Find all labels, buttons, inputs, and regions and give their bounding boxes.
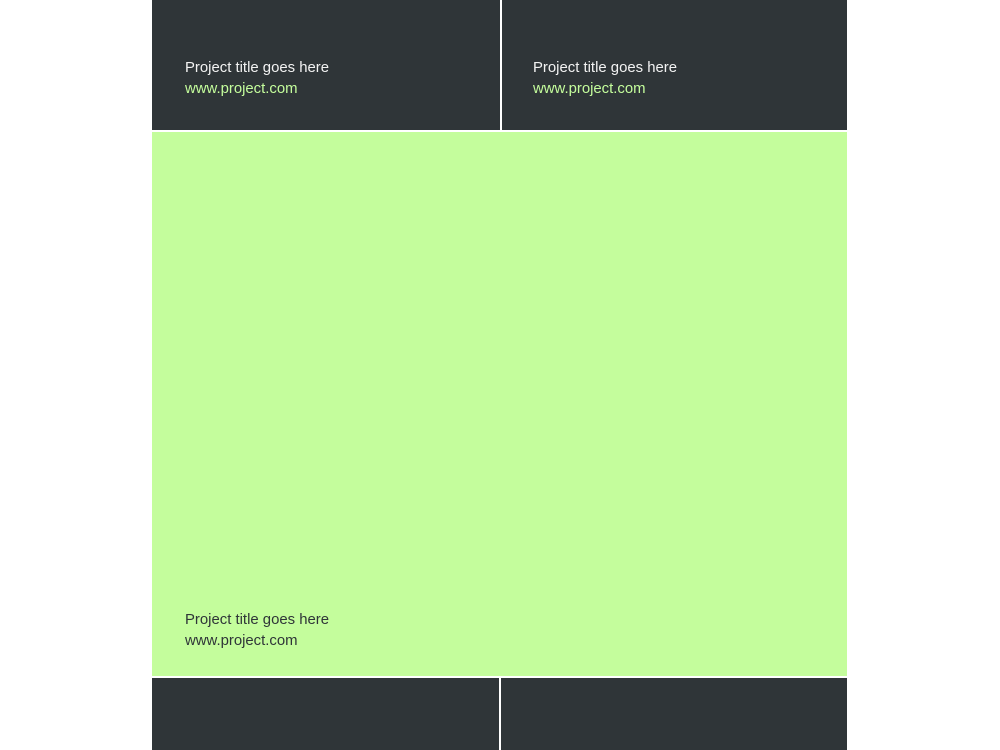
text: main caption: www.project.com <box>185 633 298 649</box>
text: top left caption: Project title goes here <box>185 60 329 76</box>
text: top right caption: www.project.com <box>533 81 646 97</box>
text: top left caption <box>185 60 329 97</box>
panel: green main <box>152 132 847 676</box>
panel: top right <box>502 0 847 130</box>
panel: bottom left <box>152 678 499 750</box>
panel: bottom right <box>501 678 847 750</box>
text: top right caption <box>533 60 677 97</box>
text: main caption: Project title goes here <box>185 612 329 628</box>
text: top right caption: Project title goes here <box>533 60 677 76</box>
text: top left caption: www.project.com <box>185 81 298 97</box>
text: main caption <box>185 612 329 649</box>
panel: top left <box>152 0 500 130</box>
